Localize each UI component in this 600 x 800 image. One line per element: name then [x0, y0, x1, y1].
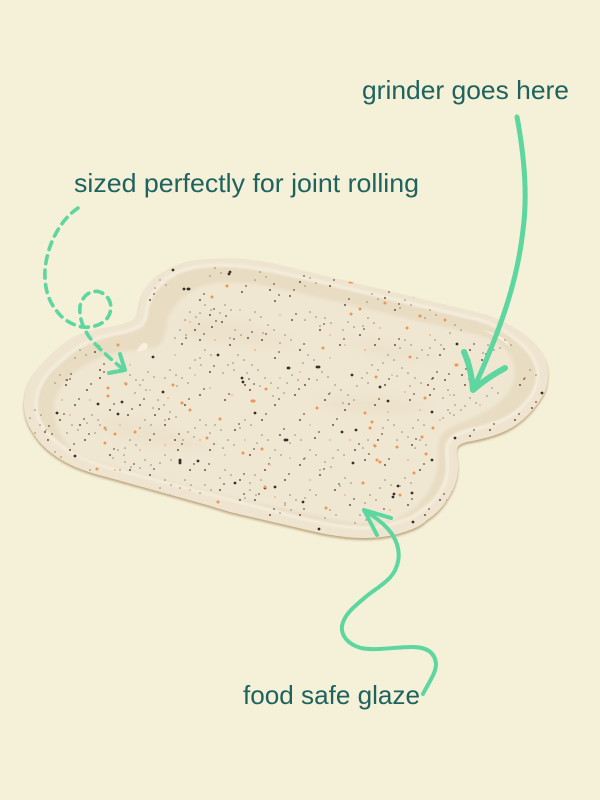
arrow: dashed joint rolling loop: [45, 208, 125, 373]
arrow head: dashed: [109, 354, 125, 373]
glaze highlight spots: [136, 330, 510, 351]
tray illustration: [24, 258, 548, 540]
infographic canvas: [22, 80, 568, 710]
extra fine speckles, second pass: [30, 276, 525, 523]
arrow head: grinder: [464, 352, 505, 390]
arrow: food safe glaze: [342, 510, 436, 694]
extra fine speckles: [41, 273, 536, 520]
tray shadow edge: [24, 260, 548, 540]
speckles: [30, 268, 542, 529]
label: food safe glaze: food safe glaze: [243, 680, 420, 710]
label: sized perfectly for joint rolling: sized perfectly for joint rolling: [74, 168, 419, 198]
tray inner wall: [38, 267, 536, 526]
dark speckles: [57, 270, 542, 529]
tray inner floor: [54, 282, 515, 524]
pale orange speckles: [62, 310, 480, 510]
orange speckles: [97, 282, 457, 508]
soft glaze shading: [90, 318, 440, 451]
label: grinder goes here: grinder goes here: [362, 75, 569, 105]
extra brown speckles: [49, 276, 536, 509]
tray outer rim: [24, 258, 548, 538]
arrow head: food safe glaze: [364, 510, 391, 535]
arrow: grinder: [464, 117, 525, 390]
brown speckles: [45, 282, 532, 515]
fine grey speckles: [35, 268, 530, 515]
rim highlight: [36, 265, 538, 528]
